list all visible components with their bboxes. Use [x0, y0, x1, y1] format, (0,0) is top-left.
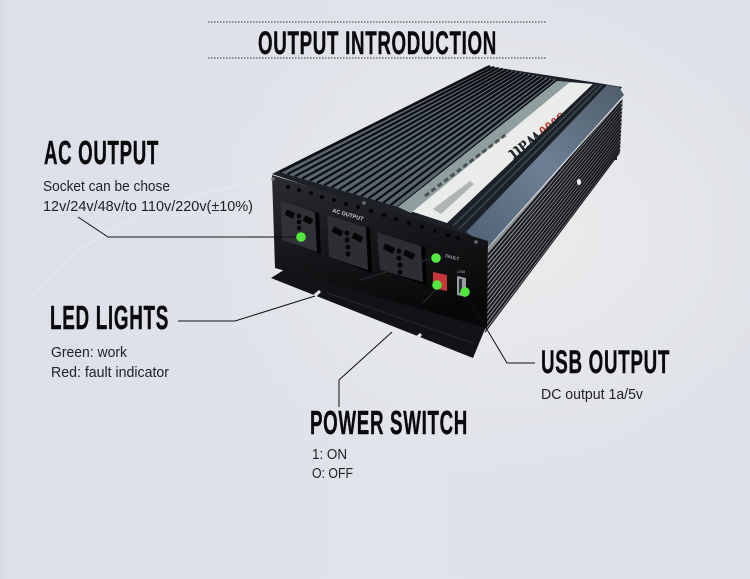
- callout: AC output: 12v/24v/48v/to 110v/220v(±10%): [43, 199, 253, 215]
- callout: power switch: [310, 332, 468, 482]
- socket 3: [377, 232, 427, 285]
- corner screws: [273, 179, 476, 242]
- LED markers: [296, 232, 470, 297]
- title: output introduction: OUTPUT INTRODUCTION: [258, 25, 497, 61]
- front panel: [272, 175, 488, 328]
- callout: LED lights: Red: fault indicator: [51, 365, 169, 381]
- printed label strip: 3000: [535, 108, 571, 142]
- top face with cooling fins: [272, 66, 622, 247]
- callout: power switch: POWER SWITCH: [310, 404, 468, 441]
- callout: AC output: [43, 134, 296, 237]
- mounting flange: [271, 268, 486, 358]
- side screw hole: [577, 179, 581, 185]
- red power switch: [433, 272, 447, 291]
- USB port: USB: [457, 269, 466, 274]
- callout: LED lights: LED LIGHTS: [50, 299, 169, 336]
- printed label strip: [398, 81, 593, 223]
- socket 1: [280, 200, 321, 254]
- callout: AC output: Socket can be chose: [43, 179, 170, 195]
- callout: LED lights: Green: work: [51, 345, 128, 361]
- printed label strip: Watt: [505, 125, 549, 167]
- callout: power switch: O: OFF: [312, 466, 353, 482]
- leader lines over panel: [360, 259, 436, 303]
- right channel and bevel: [447, 84, 624, 247]
- inverter device: [271, 66, 630, 358]
- side fins: [485, 98, 623, 333]
- callout: USB output: DC output 1a/5v: [541, 387, 644, 403]
- fault label: FAULT: [445, 253, 460, 261]
- callout: LED lights: [50, 296, 315, 381]
- USB port: [457, 269, 466, 297]
- AC output print: AC OUTPUT: [331, 208, 365, 223]
- socket 2: [327, 215, 372, 273]
- side foot: [613, 155, 617, 160]
- callout: power switch: 1: ON: [312, 447, 347, 463]
- callout: AC output: AC OUTPUT: [44, 134, 159, 171]
- callout: USB output: [467, 296, 670, 403]
- ventilation holes: [288, 187, 458, 238]
